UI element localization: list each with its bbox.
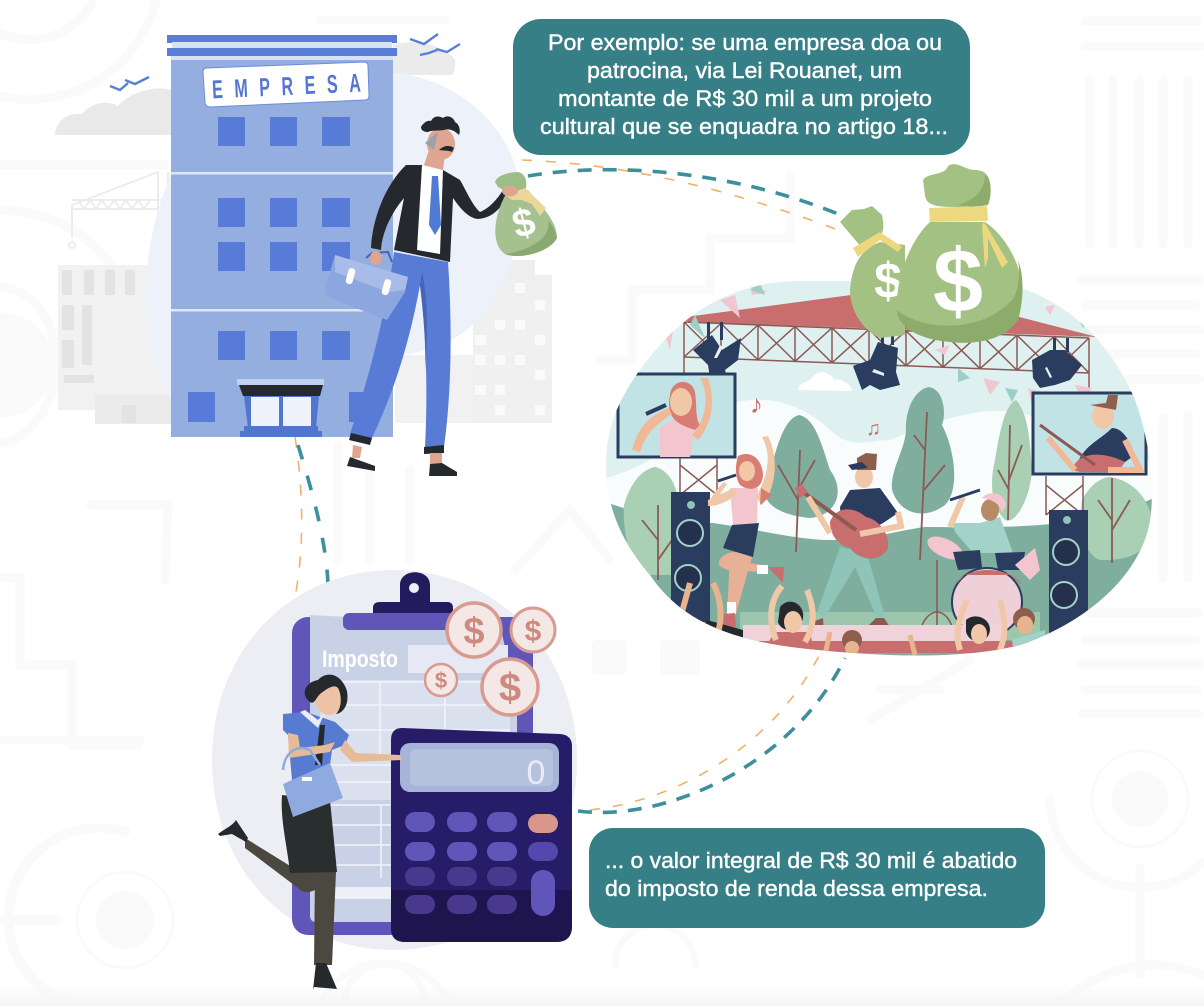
screen right xyxy=(1033,393,1146,474)
cloud right xyxy=(393,42,455,75)
drummer xyxy=(920,490,1040,636)
jacket and arms xyxy=(371,165,507,262)
coins: $ xyxy=(463,611,485,653)
coins: $ xyxy=(435,668,447,693)
screen left xyxy=(618,374,735,457)
music notes: ♪ xyxy=(750,389,763,419)
calculator xyxy=(391,728,572,942)
callout: top: patrocina, via Lei Rouanet, um xyxy=(587,58,902,83)
legs and shoes xyxy=(350,252,451,447)
handbag xyxy=(283,748,343,817)
city background xyxy=(55,42,552,424)
money bag: $ xyxy=(508,200,540,247)
callout: top: montante de R$ 30 mil a um projeto xyxy=(558,86,932,111)
truss xyxy=(684,322,1089,395)
coins: $ xyxy=(499,666,521,710)
crowd left xyxy=(705,620,743,638)
crowd fan 1 xyxy=(768,632,813,650)
roof xyxy=(678,295,1097,337)
windows xyxy=(188,117,369,422)
singer xyxy=(708,436,784,628)
support towers xyxy=(680,457,1083,515)
stage and crowd xyxy=(682,583,1045,660)
head and hair xyxy=(424,150,445,170)
money bags xyxy=(840,164,1022,343)
large bag xyxy=(897,164,1022,343)
music notes xyxy=(752,398,878,436)
door xyxy=(237,379,324,437)
clip xyxy=(343,572,458,630)
coins xyxy=(425,603,555,715)
briefcase xyxy=(366,252,392,262)
calculator: 0 xyxy=(527,754,545,792)
callout: top xyxy=(513,19,970,155)
businessman xyxy=(326,116,557,476)
small bag: $ xyxy=(874,253,902,309)
white hills xyxy=(606,400,1152,540)
ground xyxy=(610,499,1152,656)
callout: top: Por exemplo: se uma empresa doa ou xyxy=(548,30,942,55)
sign EMPRESA: EMPRESA xyxy=(211,68,362,104)
stage lights xyxy=(693,322,1082,390)
businesswoman xyxy=(218,675,402,990)
trees xyxy=(624,387,1152,580)
connector dashed lines xyxy=(294,160,845,812)
guitarist xyxy=(795,453,901,633)
crane xyxy=(69,172,171,248)
building right xyxy=(395,260,552,423)
small bag xyxy=(840,206,905,338)
cloud xyxy=(798,372,852,391)
tax circle xyxy=(212,570,577,950)
callout: bottom: do imposto de renda dessa empresa. xyxy=(605,876,988,901)
building EMPRESA xyxy=(167,35,397,437)
callout: top: cultural que se enquadra no artigo 18... xyxy=(540,114,948,139)
building left xyxy=(58,265,171,424)
large bag: $ xyxy=(933,232,983,332)
money bag xyxy=(495,172,557,256)
coins: $ xyxy=(525,615,542,648)
crowd fan 3 xyxy=(966,616,990,642)
circle behind businessman xyxy=(146,73,520,420)
music notes: ♫ xyxy=(866,418,881,440)
speakers xyxy=(671,492,1088,645)
bunting xyxy=(660,283,1092,410)
concert scene xyxy=(600,164,1160,665)
callout: bottom xyxy=(589,828,1045,928)
cloud left xyxy=(55,88,172,135)
label: Imposto: Imposto xyxy=(322,646,398,673)
crowd boy xyxy=(1013,608,1035,630)
clipboard xyxy=(292,572,533,935)
birds right xyxy=(410,34,460,55)
crowd fan 2 xyxy=(842,630,862,647)
callout: bottom: ... o valor integral de R$ 30 mil é abatido xyxy=(605,848,1017,873)
birds left xyxy=(110,77,149,90)
